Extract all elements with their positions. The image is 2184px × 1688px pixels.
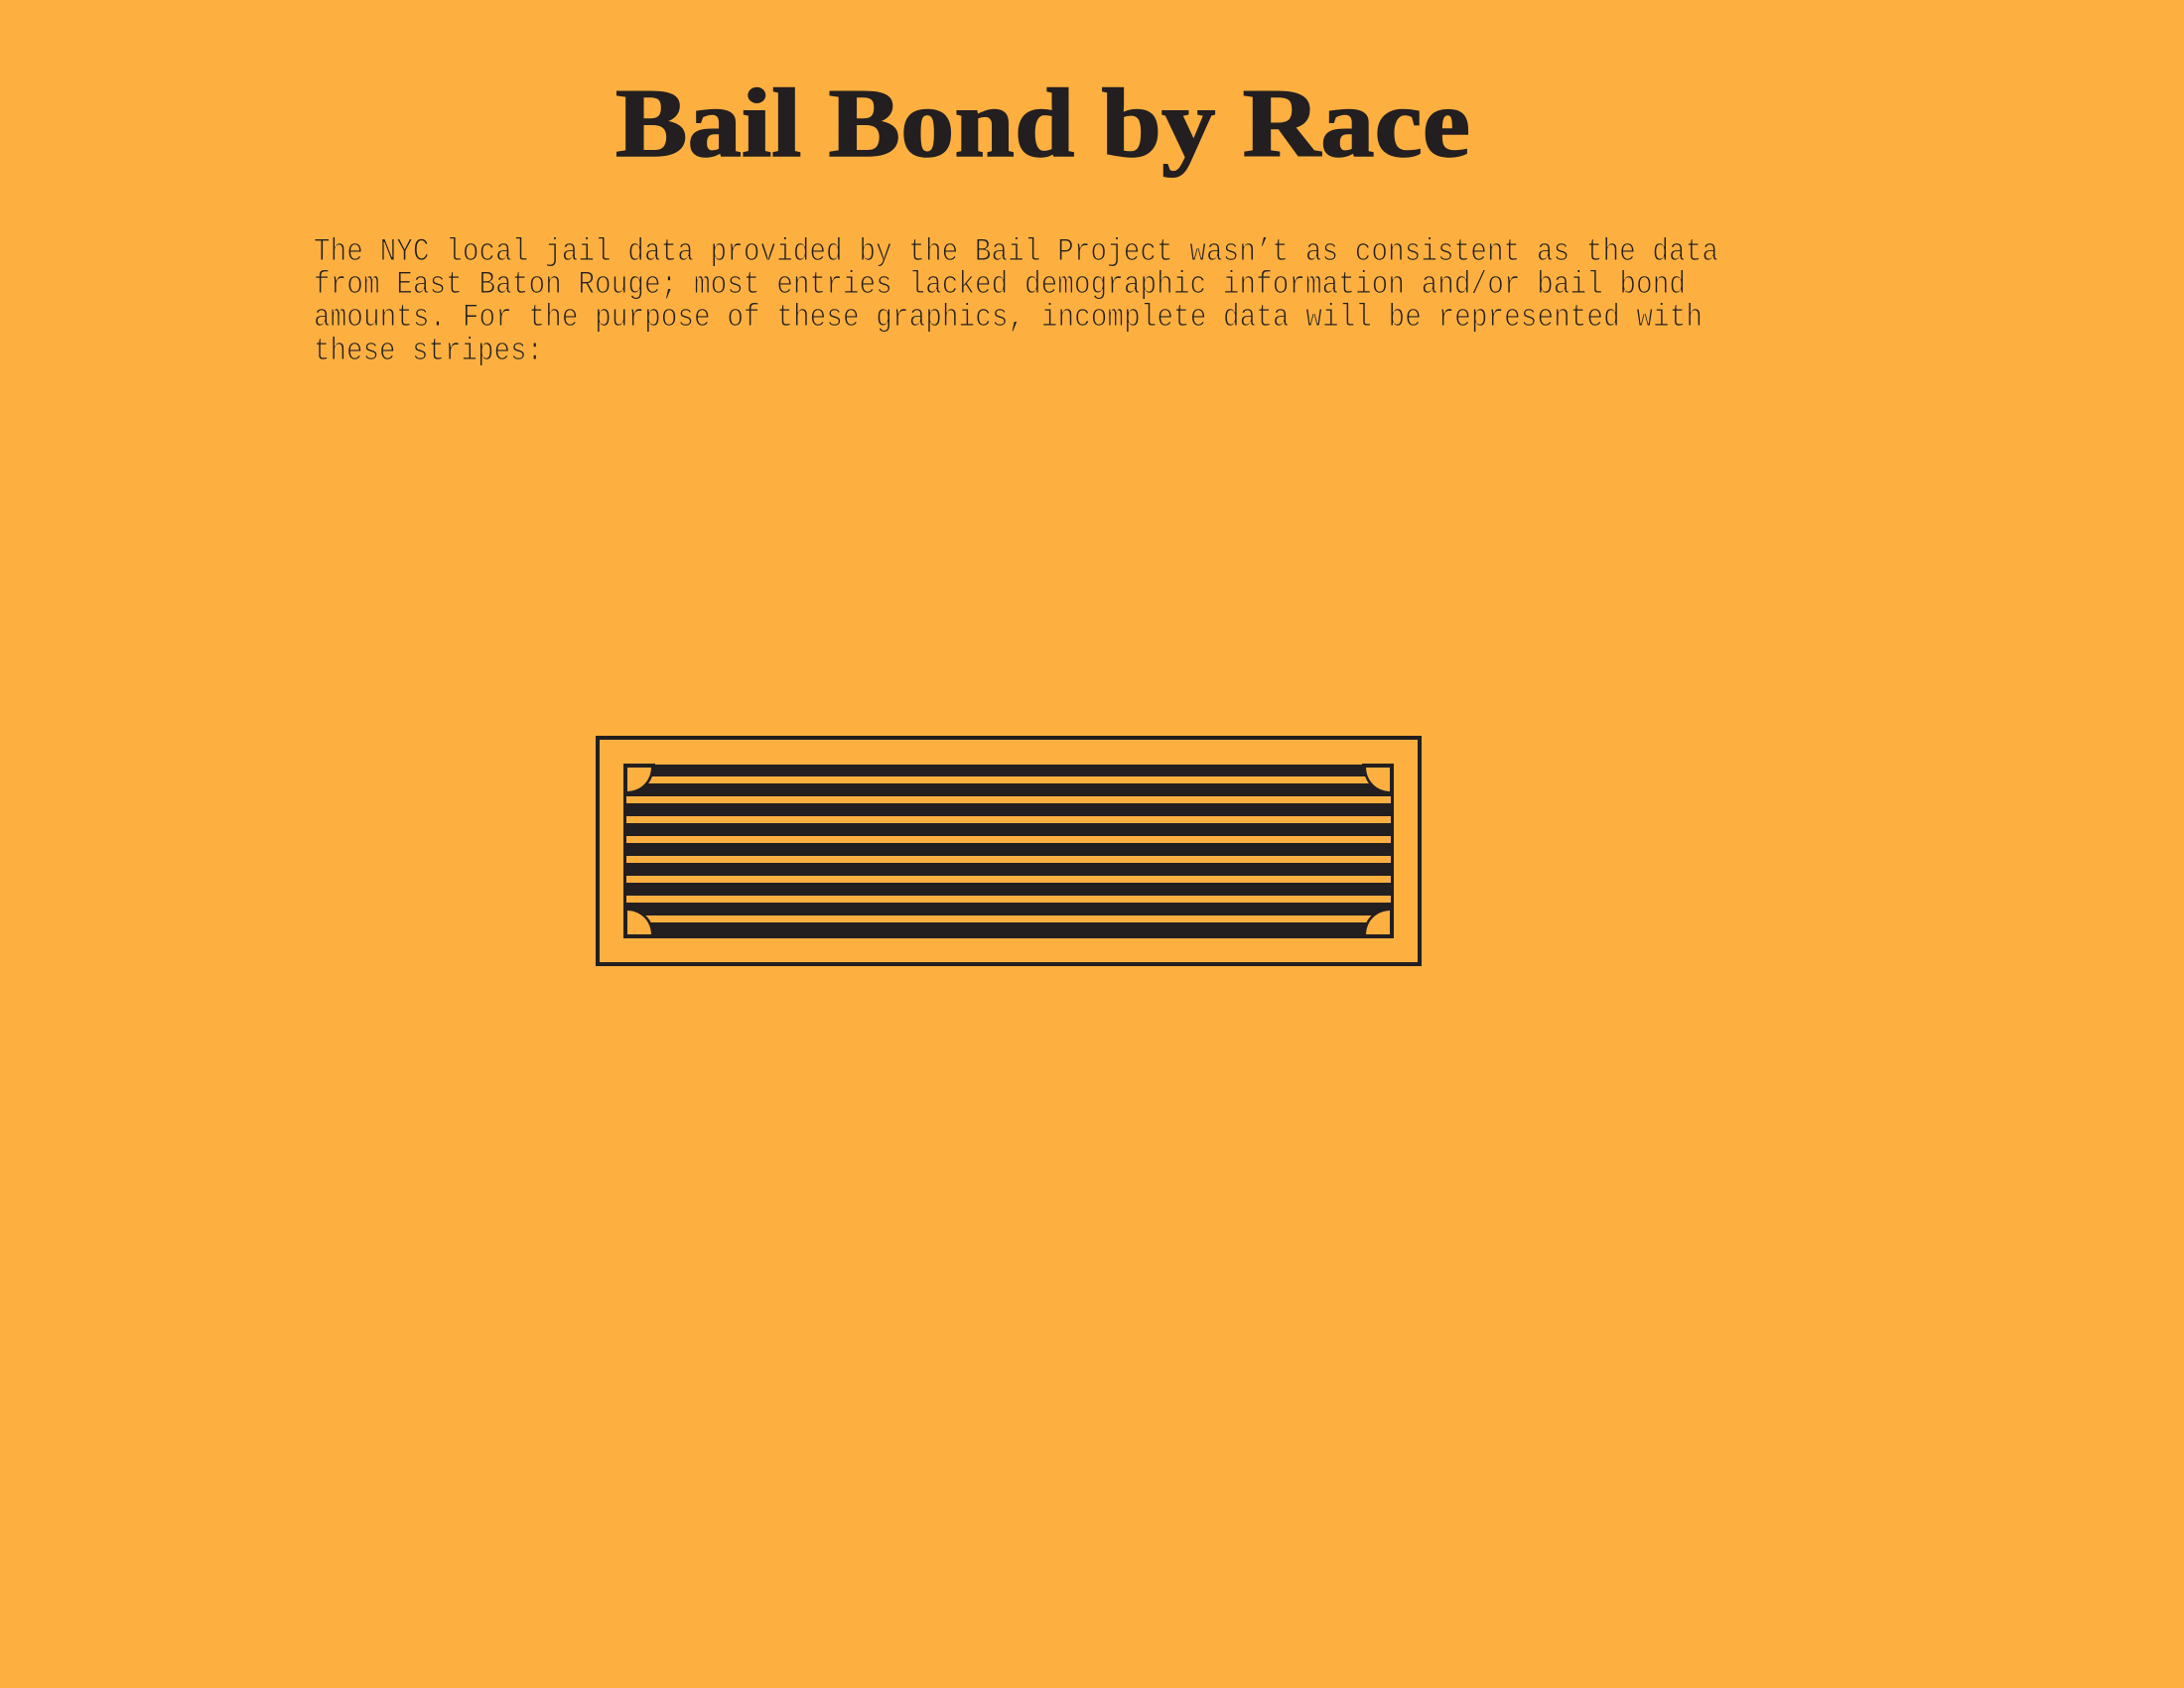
outer frame bbox=[598, 738, 1420, 964]
title: Bail Bond by Race bbox=[615, 70, 1470, 178]
corner: bottom left bbox=[623, 908, 655, 938]
intro text block: these stripes: bbox=[314, 333, 543, 369]
corner: bottom right bbox=[1362, 908, 1394, 938]
legend: incomplete data stripes swatch bbox=[598, 738, 1420, 964]
corner: top left bbox=[623, 764, 655, 793]
stripes bbox=[623, 764, 1394, 938]
intro text block: amounts. For the purpose of these graphics, incomplete data will be represented with bbox=[314, 299, 1703, 336]
intro text block bbox=[314, 233, 1718, 369]
intro text block: from East Baton Rouge; most entries lacked demographic information and/or bail bond bbox=[314, 266, 1686, 303]
corner arcs: top bbox=[627, 768, 1390, 794]
intro text block: The NYC local jail data provided by the Bail Project wasn’t as consistent as the data bbox=[314, 233, 1718, 270]
corner: top right bbox=[1362, 764, 1394, 793]
